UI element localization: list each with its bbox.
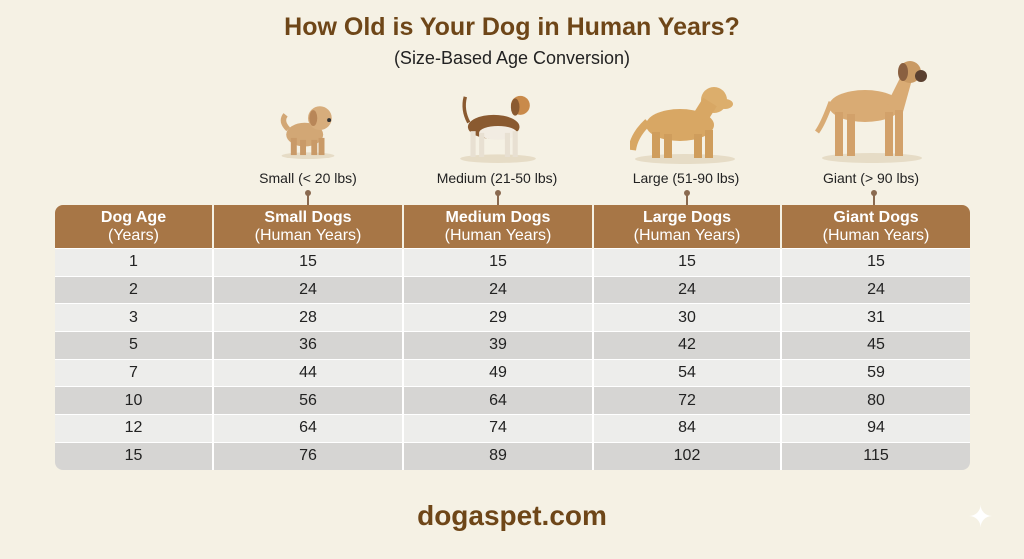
table: age conversion: 29: [489, 309, 507, 326]
table: age conversion: 115: [863, 447, 889, 464]
table: age conversion: 30: [678, 309, 696, 326]
icon: large dog: [630, 87, 735, 164]
table: age conversion: Large Dogs: [643, 208, 731, 226]
table: age conversion: 72: [678, 392, 696, 409]
table: age conversion: 2: [129, 281, 138, 298]
table: age conversion: 42: [678, 336, 696, 353]
table: age conversion: 54: [678, 364, 696, 381]
table: age conversion: 28: [299, 309, 317, 326]
table: age conversion: 76: [299, 447, 317, 464]
table: age conversion: 1: [129, 253, 138, 270]
table: age conversion: 74: [489, 419, 507, 436]
table: age conversion: (Human Years): [634, 226, 740, 244]
table: age conversion: 56: [299, 392, 317, 409]
table: age conversion: 44: [299, 364, 317, 381]
table: age conversion: Small Dogs: [264, 208, 352, 226]
table: age conversion: 15: [678, 253, 696, 270]
table: age conversion: Medium Dogs: [446, 208, 550, 226]
table: age conversion: 24: [678, 281, 696, 298]
table: age conversion: 7: [129, 364, 138, 381]
table: age conversion: Dog Age: [101, 208, 166, 226]
icon: medium dog: [460, 96, 536, 163]
table: age conversion: [55, 205, 970, 470]
table: age conversion: 49: [489, 364, 507, 381]
table: age conversion: 39: [489, 336, 507, 353]
label: large: Large (51-90 lbs): [633, 170, 739, 186]
table: age conversion: (Human Years): [823, 226, 929, 244]
table: age conversion: 24: [299, 281, 317, 298]
title: How Old is Your Dog in Human Years?: [284, 13, 740, 41]
table: age conversion: 59: [867, 364, 885, 381]
table: age conversion: 24: [867, 281, 885, 298]
table: age conversion: Giant Dogs: [833, 208, 919, 226]
table: age conversion: 15: [125, 447, 142, 464]
table: age conversion: 31: [867, 309, 885, 326]
table: age conversion: 15: [299, 253, 317, 270]
table: age conversion: 84: [678, 419, 696, 436]
table: age conversion: (Human Years): [255, 226, 361, 244]
table: age conversion: 89: [489, 447, 507, 464]
label: small: Small (< 20 lbs): [259, 170, 357, 186]
table: age conversion: 64: [489, 392, 507, 409]
icon: sparkle: ✦: [968, 501, 993, 534]
table: age conversion: 15: [867, 253, 885, 270]
table: age conversion: 3: [129, 309, 138, 326]
table: age conversion: 5: [129, 336, 138, 353]
table: age conversion: 64: [299, 419, 317, 436]
footer: website: dogaspet.com: [417, 500, 607, 531]
icon: small dog: [280, 106, 334, 159]
table: age conversion: (Years): [108, 226, 159, 244]
icon: giant dog: [815, 61, 927, 163]
table: age conversion: 94: [867, 419, 885, 436]
table: age conversion: 15: [489, 253, 507, 270]
label: giant: Giant (> 90 lbs): [823, 170, 919, 186]
table: age conversion: 36: [299, 336, 317, 353]
table: age conversion: 24: [489, 281, 507, 298]
table: age conversion: 102: [674, 447, 700, 464]
table: age conversion: 12: [125, 419, 142, 436]
subtitle: (Size-Based Age Conversion): [394, 48, 630, 68]
label: medium: Medium (21-50 lbs): [437, 170, 557, 186]
table: age conversion: 10: [125, 392, 142, 409]
table: age conversion: (Human Years): [445, 226, 551, 244]
table: age conversion: 45: [867, 336, 885, 353]
table: age conversion: 80: [867, 392, 885, 409]
